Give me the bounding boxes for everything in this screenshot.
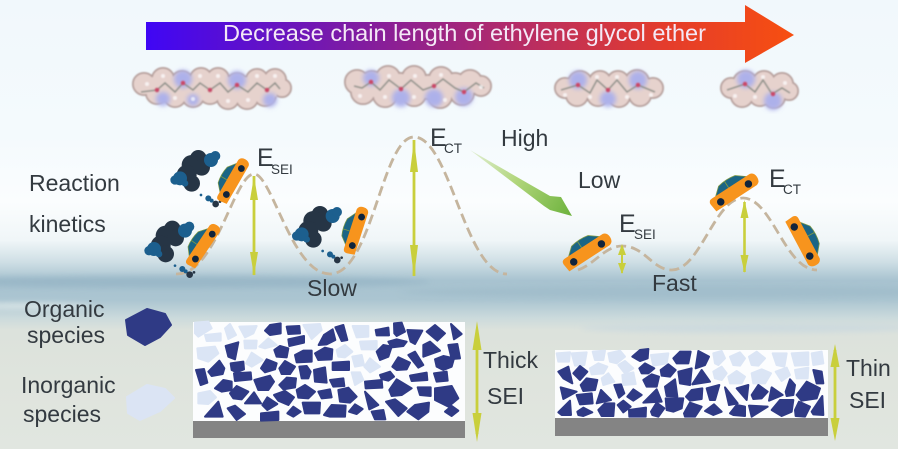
molecule: longest chain — [133, 68, 291, 109]
speed and level labels: Low — [578, 167, 621, 193]
legend: inorganic species: species — [23, 401, 101, 427]
cars on the fast curve — [557, 165, 829, 272]
energy labels: E — [769, 165, 786, 193]
label: reaction kinetics — [29, 170, 120, 237]
energy curve: slow — [176, 137, 507, 274]
energy labels — [257, 124, 801, 242]
panel: thin SEI — [555, 349, 828, 436]
label: reaction kinetics: Reaction — [29, 170, 120, 196]
thick SEI arrow and label: Thick — [483, 347, 538, 373]
legend: organic species: species — [27, 322, 105, 348]
legend: inorganic species — [21, 372, 174, 427]
energy labels: CT — [444, 141, 462, 156]
green high to low arrow — [470, 150, 572, 216]
thick SEI particles — [195, 322, 462, 421]
speed and level labels: Fast — [652, 270, 697, 296]
energy labels: E — [619, 210, 636, 238]
thin SEI arrow and label: SEI — [849, 387, 886, 413]
thin SEI arrow and label — [830, 344, 891, 441]
energy arrows — [250, 140, 748, 277]
smoke clouds — [144, 150, 343, 278]
thick SEI arrow and label: SEI — [487, 383, 524, 409]
energy labels: SEI — [271, 162, 293, 177]
legend: organic species — [24, 296, 171, 348]
molecule: third chain — [555, 70, 663, 107]
panel: thick SEI — [193, 322, 465, 438]
arrow label: Decrease chain length of ethylene glycol ether — [223, 20, 706, 46]
legend: inorganic species: Inorganic — [21, 372, 116, 398]
speed and level labels: Slow — [307, 275, 357, 301]
legend: organic species: Organic — [24, 296, 105, 322]
cars on the slow curve — [179, 153, 369, 269]
speed and level labels: High — [501, 125, 548, 151]
molecule: second chain — [345, 66, 491, 108]
energy labels: SEI — [634, 227, 656, 242]
top gradient arrow — [146, 5, 794, 63]
thick SEI arrow and label — [472, 321, 538, 442]
thin SEI particles — [557, 349, 823, 417]
energy labels: E — [430, 124, 447, 152]
label: reaction kinetics: kinetics — [29, 211, 106, 237]
energy labels: CT — [783, 182, 801, 197]
molecule: shortest chain — [721, 70, 798, 110]
thin SEI arrow and label: Thin — [846, 355, 891, 381]
energy labels: E — [257, 144, 274, 172]
speed and level labels — [307, 125, 697, 301]
energy curve: fast — [578, 198, 817, 270]
